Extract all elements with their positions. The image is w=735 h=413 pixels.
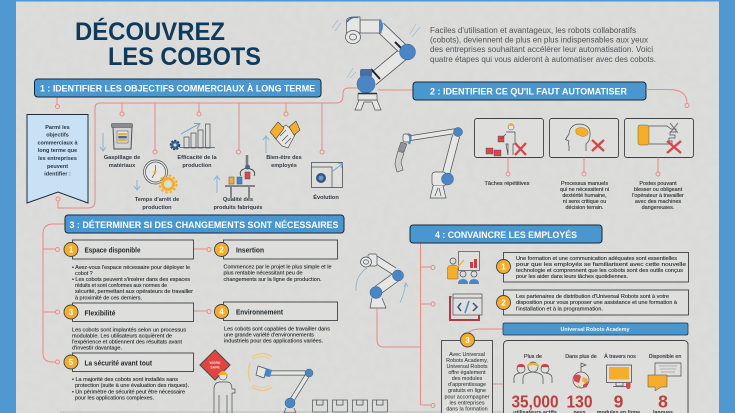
caption: avec des machines (635, 199, 681, 205)
heading 4: 4 : CONVAINCRE LES EMPLOYÉS (435, 230, 577, 241)
icon: second robot arm (395, 128, 462, 198)
caption: qui ne nécessitent ni (560, 187, 609, 193)
item 2: insertion: changements sur la ligne de production. (224, 277, 322, 283)
intro paragraph: quatre étapes qui vous aideront à automatiser avec des cobots. (430, 55, 656, 64)
item 1: espace disponible: 1 (69, 246, 74, 254)
ribbon callout: peuvent (47, 164, 68, 170)
caption: dangereuses. (642, 205, 674, 211)
item 3: flexibilité: d'investir davantage. (72, 346, 122, 352)
item 3: academy text: les entreprises (449, 400, 485, 406)
item 5: sécurité: • Un périmètre de sécurité peut être nécessaire (72, 390, 185, 396)
item 2: insertion: 2 (219, 246, 224, 254)
stat: modules: 9 (614, 392, 624, 412)
item: partners text: 2 (501, 298, 506, 308)
label: bien-être: employés (271, 163, 297, 169)
label: efficacité: production (182, 163, 212, 169)
label: qualité (213, 197, 263, 211)
heading 3: 3 : DÉTERMINER SI DES CHANGEMENTS SONT NÉCESSAIRES (70, 220, 338, 231)
title (75, 17, 261, 71)
item 5: sécurité: 5 (69, 358, 74, 367)
item 3: academy text: pour accompagner (445, 394, 490, 400)
stat: languages: 8 (658, 392, 668, 412)
heading 1: 1 : IDENTIFIER LES OBJECTIFS COMMERCIAUX À LONG TERME (40, 84, 315, 94)
item 2: insertion: plus rentable nécessitant peu de (224, 270, 302, 276)
item 3: academy text (431, 333, 492, 413)
item 5: sécurité: • La majorité des cobots sont installés sans (72, 377, 178, 383)
connector lines section 1 (56, 88, 358, 208)
item 4: environnement: Environnement (236, 308, 283, 316)
connector lines section 3 (43, 224, 207, 362)
item 3: academy text: gratuits en ligne (448, 388, 486, 394)
caption (632, 181, 684, 211)
icon: evolution window (312, 162, 342, 188)
item: training text: pour les aider dans leurs tâches quotidiennes. (516, 274, 628, 280)
heading 4 (410, 225, 602, 243)
ribbon callout: long terme que (38, 148, 77, 154)
connector to step 2 boxes (646, 90, 689, 108)
caption: Postes pouvant (639, 181, 677, 187)
item: training text: pour que les employés se familiarisent avec cette nouvelle (516, 262, 686, 268)
caption: blesser ou obligeant (634, 187, 683, 193)
icon: handshake (263, 121, 300, 153)
label: gaspillage: matériaux (109, 163, 136, 169)
label: qualité: produits fabriqués (213, 205, 263, 211)
item 4: environnement: industriels pour des applications variées. (224, 338, 323, 344)
icon: head and brain (566, 124, 604, 151)
label: temps d'arrêt: production (142, 205, 172, 211)
item 1: espace disponible: à proximité de ces derniers. (75, 296, 142, 302)
stat: languages: Disponible en (649, 354, 681, 360)
item 4: environnement: 4 (219, 308, 224, 316)
item 2: insertion (207, 240, 338, 283)
icon: training (431, 252, 480, 284)
item: training text: technologie et comprennent que les cobots sont des outils conçus (516, 268, 683, 274)
label: qualité: Qualité des (223, 197, 253, 203)
item 1: espace disponible: sécurité, permettant aux opérateurs de travailler (75, 289, 193, 295)
stat: languages (648, 354, 681, 413)
item: partners text: Les partenaires de distribution d'Universal Robots sont à votre (516, 294, 669, 300)
connector line to heading 2 (378, 89, 413, 91)
panel: dangerous posts (624, 118, 694, 211)
caption (560, 181, 609, 211)
item 2: insertion: Insertion (236, 246, 264, 254)
label: bien-être (266, 155, 302, 169)
intro paragraph (430, 26, 656, 64)
intro paragraph: Faciles d'utilisation et avantageux, les robots collaboratifs (430, 26, 636, 35)
academy title bar (503, 323, 688, 335)
heading 3 (65, 215, 344, 233)
connector (507, 158, 509, 172)
heading 2: 2 : IDENTIFIER CE QU'IL FAUT AUTOMATISER (430, 86, 627, 98)
item 5: sécurité: pour les applications complexes. (75, 396, 154, 402)
item 1: espace disponible: • Les cobots peuvent s'insérer dans des espaces (72, 277, 190, 283)
icon: third robot with boxes (60, 354, 660, 413)
icon: waste bin (100, 124, 132, 151)
label: gaspillage (104, 155, 140, 169)
item 3: flexibilité: l'expérience et obtiennent des résultats avant (72, 340, 183, 346)
icon: work safe sign and worker (200, 350, 235, 413)
caption: ni sens critique ou (563, 199, 606, 205)
item 3: flexibilité: Les cobots sont implantés selon un processus (72, 328, 186, 334)
ribbon callout: identifier : (44, 172, 71, 178)
caption: Processus manuels (561, 181, 608, 187)
label: bien-être: Bien-être des (266, 155, 302, 161)
item: training text: Une formation et une communication adéquates sont essentielles (516, 256, 677, 262)
academy title bar: Universal Robots Academy (560, 327, 630, 333)
label: efficacité: Efficacité de la (177, 155, 217, 161)
icon: clock and gear (134, 160, 176, 192)
connector (657, 158, 659, 172)
icon: fourth robot arm (356, 254, 408, 308)
ribbon callout: Parmi les (45, 125, 70, 131)
icon: hand and blade (638, 123, 681, 153)
item 4: environnement: une grande variété d'environnements (224, 332, 314, 338)
stat: modules: À travers nos (604, 353, 636, 360)
panel: repetitive tasks (474, 118, 544, 187)
label: temps d'arrêt (135, 197, 179, 211)
item 3: academy text: Robots Academy, (446, 358, 488, 364)
item 3: academy text: 3 (465, 336, 470, 345)
connector lines section 4 (377, 243, 503, 405)
stat: users: Plus de (524, 354, 542, 360)
item 3: academy text: des modules (452, 376, 483, 382)
intro paragraph: (cobots), deviennent de plus en plus indispensables aux yeux (430, 36, 648, 44)
item: training text (496, 252, 688, 282)
item 1: espace disponible: réduits et sont conformes aux normes de (75, 283, 167, 289)
item 4: environnement: Les cobots sont capables de travailler dans (224, 326, 330, 332)
item 4: environnement (207, 302, 338, 344)
item 3: flexibilité: Flexibilité (84, 308, 116, 318)
panel: manual processes (550, 118, 618, 211)
item 1: espace disponible: Espace disponible (84, 246, 140, 254)
item 5: sécurité: protection (suite à une évaluation des risques). (75, 383, 189, 389)
item 3: flexibilité: modulable. Les utilisateurs acquièrent de (72, 334, 172, 340)
heading 2 (413, 82, 646, 100)
icon: quality conveyor (214, 155, 255, 198)
label: efficacité (177, 155, 217, 169)
intro paragraph: des entreprises souhaitant accélérer leur automatisation. Voici (430, 45, 653, 54)
item 3: academy text: Universal Robots (446, 364, 488, 370)
item 3: flexibilité: 3 (69, 308, 74, 317)
caption: l'opérateur à travailler (632, 193, 684, 199)
item 1: espace disponible: • Avez-vous l'espace nécessaire pour déployer le (72, 265, 190, 271)
icon: main robot arm (332, 17, 420, 110)
ribbon callout: commerciaux à (37, 140, 78, 146)
item: partners text: disposition pour vous proposer une assistance et une formation à (516, 300, 677, 306)
item 3: academy text: offre également (448, 370, 486, 376)
icon: efficiency bars (171, 124, 215, 149)
item 3: academy text: dans la formation (446, 406, 488, 412)
item 3: flexibilité (56, 303, 194, 352)
item 1: espace disponible: cobot ? (75, 271, 93, 277)
caption: Tâches répétitives (484, 181, 530, 187)
heading 1 (34, 79, 321, 97)
item 2: insertion: Commencez par le projet le plus simple et le (224, 264, 332, 270)
caption: dextérité humaine, (562, 193, 607, 199)
item 1: espace disponible (56, 240, 194, 302)
stat: countries: Dans plus de (565, 354, 597, 360)
item 3: academy text: Avec Universal (449, 352, 485, 358)
item: partners text: l'installation et à la programmation. (516, 306, 603, 312)
label: temps d'arrêt: Temps d'arrêt de (135, 197, 179, 203)
stat: countries: 130 (566, 392, 593, 412)
label: évolution: Évolution (313, 193, 339, 201)
stat: modules (597, 353, 640, 413)
title: DÉCOUVREZ (75, 17, 225, 46)
item 5: sécurité: La sécurité avant tout (84, 358, 152, 368)
item 3: academy text: d'apprentissage (448, 382, 486, 388)
ribbon callout: objectifs (46, 132, 69, 138)
stat: countries (565, 354, 597, 413)
connector (583, 158, 585, 172)
caption: décision terrain. (565, 205, 604, 211)
icon: worker and boxes (486, 123, 526, 156)
panel: academy statistics (504, 340, 688, 413)
stat: users (512, 354, 559, 413)
icon: work safe sign and worker: SAFE (210, 366, 220, 370)
ribbon callout: les entreprises (38, 156, 77, 162)
stat: users: 35,000 (512, 392, 559, 412)
item: partners text (496, 290, 688, 315)
title: LES COBOTS (108, 43, 261, 71)
icon: work safe sign and worker: WORK (209, 361, 221, 365)
label: gaspillage: Gaspillage de (104, 155, 140, 161)
icon: code window (431, 294, 482, 320)
ribbon callout (27, 114, 88, 203)
item 5: sécurité (56, 353, 194, 402)
item: training text: 1 (501, 262, 506, 272)
